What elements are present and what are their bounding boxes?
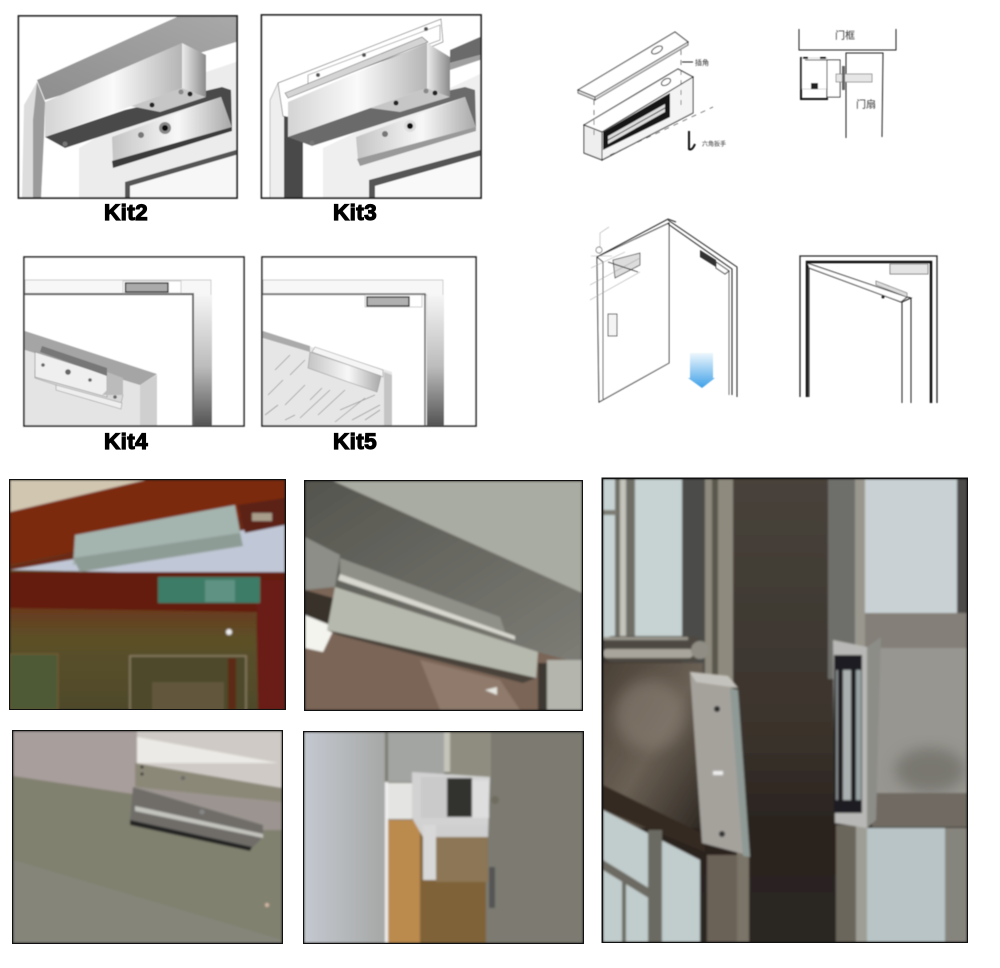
diagram: door leaf with bracket and arrow bbox=[590, 219, 737, 402]
diagram: exploded magnet with plate: 插角 bbox=[695, 58, 709, 67]
label: Kit3: Kit3 bbox=[333, 200, 377, 225]
glass clamp bracket bbox=[308, 347, 383, 392]
panel: Kit5 illustration bbox=[262, 257, 476, 426]
z bracket bbox=[35, 346, 123, 409]
label: Kit5: Kit5 bbox=[333, 429, 377, 454]
diagram: exploded magnet with plate: 六角扳手 bbox=[702, 140, 726, 148]
photo: aluminium housing on red wooden door frame bbox=[9, 479, 286, 716]
photo: housing under grey door header bbox=[304, 480, 583, 711]
armature plate bbox=[288, 87, 476, 166]
panel: Kit3 illustration bbox=[262, 15, 481, 198]
right door glazing bbox=[828, 479, 967, 942]
magnet housing bbox=[288, 43, 450, 146]
arrow: downward blue bbox=[688, 353, 715, 388]
diagram: side view of door frame: 门扇 bbox=[856, 98, 876, 111]
armature plate bbox=[690, 672, 750, 857]
glass door leaf bbox=[263, 331, 392, 425]
surface magnet bbox=[123, 281, 181, 293]
door leaf bbox=[25, 331, 157, 425]
label: Kit4: Kit4 bbox=[104, 429, 148, 454]
photo: large magnet and armature on steel double door bbox=[602, 478, 968, 943]
magnet housing bbox=[45, 43, 206, 146]
electromagnet bbox=[833, 637, 881, 828]
diagram: exploded magnet with plate bbox=[578, 32, 726, 160]
diagram: closed door in frame bbox=[800, 256, 937, 403]
photo: glass door clamp on wooden door bbox=[303, 731, 584, 944]
armature plate bbox=[45, 87, 232, 168]
diagram: side view of door frame: 门框 bbox=[835, 29, 855, 42]
photo: armature under ceiling bracket bbox=[12, 730, 283, 944]
diagram: side view of door frame bbox=[799, 29, 896, 138]
left door glazing bbox=[603, 479, 749, 942]
door handle bbox=[603, 636, 709, 662]
label: Kit2: Kit2 bbox=[104, 200, 148, 225]
surface magnet bbox=[365, 295, 422, 307]
panel: Kit2 illustration bbox=[18, 16, 237, 198]
panel: Kit4 illustration bbox=[24, 257, 244, 426]
mounting bracket bbox=[285, 25, 440, 98]
